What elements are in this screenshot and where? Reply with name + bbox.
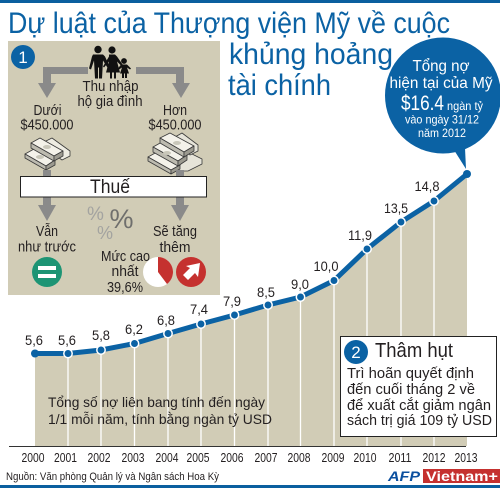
axis line — [9, 446, 466, 448]
callout: total debt: vào ngày 31/12 — [405, 112, 479, 126]
icon: percent signs: % — [97, 223, 113, 243]
arrow: left tax — [38, 170, 56, 221]
line series — [35, 174, 467, 354]
value labels: 7,9 — [223, 293, 241, 309]
bottom bar — [0, 485, 500, 488]
deficit text: để xuất cắt giảm ngân — [347, 397, 491, 414]
value labels: 5,6 — [25, 332, 43, 348]
label: household income — [78, 79, 142, 110]
label: will increase: Sẽ tăng — [153, 224, 197, 240]
arrow: right tax — [171, 170, 189, 221]
deficit text — [347, 366, 492, 429]
icon: up arrow — [176, 257, 206, 287]
axis years: 2013 — [454, 451, 478, 465]
label: household income: hộ gia đình — [78, 94, 142, 110]
badge 1: 1 — [18, 48, 28, 67]
data points — [31, 170, 471, 358]
label: under 450000 — [20, 103, 74, 134]
title: Dự luật của Thượng viện Mỹ về cuộc — [8, 7, 450, 40]
arrow: left income — [38, 67, 88, 98]
chart note: 1/1 mỗi năm, tính bằng ngàn tỷ USD — [48, 411, 272, 427]
label: under 450000: Dưới — [34, 103, 62, 119]
axis years: 2011 — [388, 451, 412, 465]
badge 1 — [11, 45, 35, 69]
icon: percent signs: % — [109, 204, 134, 234]
icon: percent signs — [87, 204, 134, 243]
axis years: 2007 — [254, 451, 278, 465]
value labels: 7,4 — [190, 301, 208, 317]
value labels: 10,0 — [314, 258, 339, 274]
deficit text: Trì hoãn quyết định — [347, 366, 474, 382]
label: unchanged — [18, 223, 76, 256]
axis years: 2000 — [22, 451, 45, 465]
deficit text: sách trị giá 109 tỷ USD — [347, 413, 492, 429]
value labels: 6,2 — [125, 321, 143, 337]
arrow: right income — [136, 67, 190, 98]
callout: total debt: Tổng nợ — [412, 58, 470, 75]
callout: total debt — [385, 38, 500, 169]
label: highest rate — [101, 249, 150, 296]
axis years: 2008 — [288, 451, 311, 465]
callout: total debt: $16.4 — [401, 92, 444, 115]
value labels: 14,8 — [414, 178, 440, 194]
icon: family — [89, 46, 131, 78]
chart note: Tổng số nợ liên bang tính đến ngày — [48, 394, 265, 410]
tax box: Thuế — [90, 177, 130, 198]
deficit heading: Thâm hụt — [375, 340, 453, 362]
panel: tax — [8, 41, 220, 296]
label: household income: Thu nhập — [82, 79, 138, 95]
label: over 450000: Hơn — [163, 103, 187, 119]
label: over 450000 — [148, 103, 202, 134]
value labels: 11,9 — [348, 227, 372, 243]
icon: equals — [32, 257, 62, 287]
label: unchanged: Vẫn — [36, 223, 58, 240]
value labels: 5,8 — [92, 327, 110, 343]
axis years: 2012 — [422, 451, 446, 465]
label: will increase — [153, 224, 197, 256]
axis years: 2001 — [54, 451, 77, 465]
value labels: 9,0 — [291, 276, 309, 292]
source: Nguồn: Văn phòng Quản lý và Ngân sách Hoa Kỳ — [6, 471, 219, 483]
deficit text: đến cuối tháng 2 về — [347, 382, 475, 398]
callout: total debt: năm 2012 — [418, 126, 466, 140]
logo: AFP: AFP — [387, 468, 421, 484]
label: unchanged: như trước — [18, 240, 76, 256]
label: highest rate: 39,6% — [107, 280, 143, 296]
label: over 450000: $450.000 — [148, 118, 202, 134]
callout: total debt: ngàn tỷ — [447, 99, 483, 113]
icon: percent signs: % — [87, 204, 104, 225]
axis years: 2005 — [186, 451, 210, 465]
badge 2 — [344, 340, 368, 364]
panel: deficit — [340, 336, 496, 436]
value labels — [25, 178, 440, 348]
label: highest rate: Mức cao — [101, 249, 150, 265]
axis years: 2002 — [88, 451, 111, 465]
label: highest rate: nhất — [112, 264, 138, 280]
callout: total debt: hiện tại của Mỹ — [390, 75, 493, 92]
title: khủng hoảng — [229, 38, 393, 71]
top bar — [0, 0, 500, 3]
chart note — [48, 394, 272, 427]
value labels: 13,5 — [384, 200, 408, 216]
title: tài chính — [228, 69, 331, 102]
icon: pie 39.6% — [143, 257, 173, 287]
label: will increase: thêm — [160, 240, 190, 256]
axis years: 2009 — [322, 451, 345, 465]
logo: Vietnam+: Vietnam+ — [426, 469, 498, 484]
icon: money right — [148, 133, 202, 174]
axis years: 2004 — [156, 451, 179, 465]
badge 2: 2 — [351, 343, 361, 362]
axis years — [22, 451, 478, 465]
axis years: 2010 — [354, 451, 377, 465]
tax box — [20, 176, 206, 198]
area chart: federal debt — [9, 170, 478, 465]
label: under 450000: $450.000 — [20, 118, 74, 134]
axis years: 2003 — [122, 451, 145, 465]
value labels: 5,6 — [58, 332, 76, 348]
value labels: 6,8 — [157, 312, 175, 328]
icon: money left — [25, 138, 70, 170]
axis years: 2006 — [220, 451, 244, 465]
title — [8, 7, 450, 102]
value labels: 8,5 — [257, 284, 275, 300]
